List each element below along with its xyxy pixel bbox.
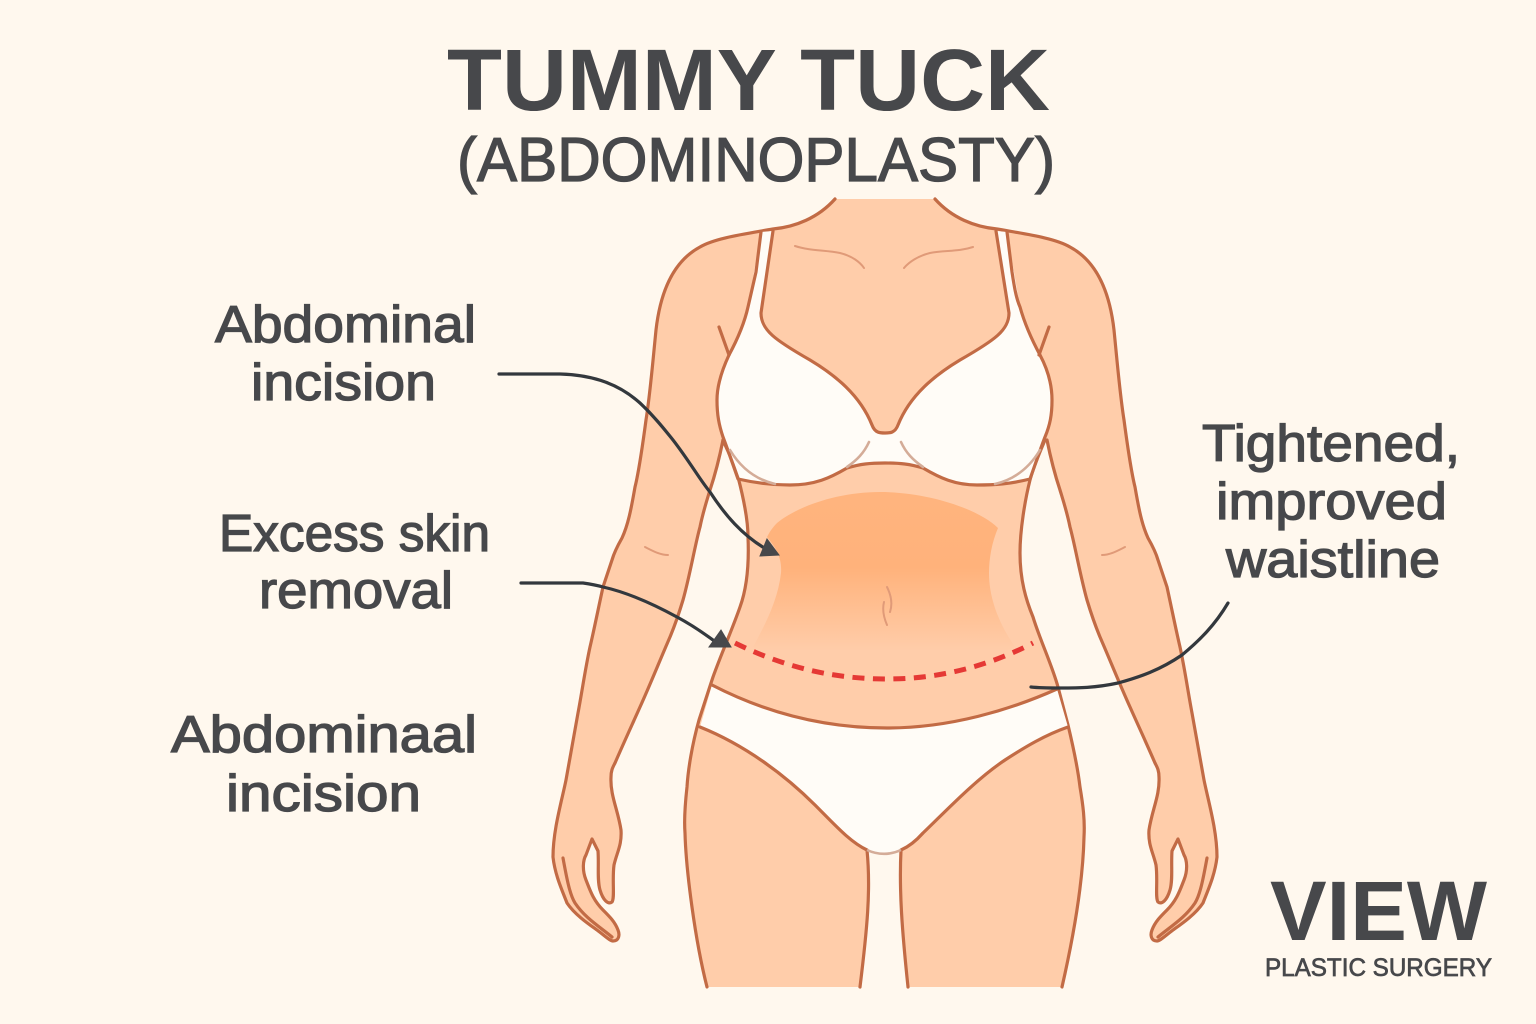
armpit creases: [719, 327, 1049, 355]
label: Tightened, improved waistline: waistline: [1225, 531, 1440, 589]
bra: [717, 231, 1052, 485]
body illustration: [553, 199, 1217, 987]
arrow: tightened waistline: [1031, 603, 1228, 688]
label: Excess skin removal: removal: [259, 562, 453, 620]
label: Abdominal incision: Abdominal: [215, 296, 476, 354]
left arm and shoulder: [553, 199, 885, 941]
label: Tightened, improved waistline: Tightened,: [1202, 415, 1460, 473]
label: Tightened, improved waistline: [1202, 415, 1460, 589]
navel: [883, 587, 891, 625]
label: Excess skin removal: [219, 505, 490, 620]
logo: VIEW: [1270, 864, 1488, 958]
underwear: [700, 685, 1068, 854]
incision dashed line: [735, 643, 1033, 679]
subtitle: (ABDOMINOPLASTY): [457, 126, 1055, 195]
torso and legs: [685, 440, 1084, 987]
title: TUMMY TUCK: [447, 32, 1050, 129]
arrow: excess skin removal: [521, 583, 731, 647]
arrow: abdominal incision: [499, 374, 779, 556]
abdomen shaded area: [753, 492, 1015, 663]
label: Abdominaal incision: [171, 706, 477, 823]
label: Tightened, improved waistline: improved: [1216, 473, 1447, 531]
logo: PLASTIC SURGERY: [1265, 954, 1492, 982]
label: Abdominaal incision: Abdominaal: [171, 706, 477, 764]
collarbone lines: [795, 246, 973, 268]
right arm and shoulder: [885, 199, 1217, 941]
label: Abdominaal incision: incision: [226, 765, 421, 823]
label: Abdominal incision: [215, 296, 476, 412]
label: Abdominal incision: incision: [251, 354, 436, 412]
label: Excess skin removal: Excess skin: [219, 505, 490, 563]
